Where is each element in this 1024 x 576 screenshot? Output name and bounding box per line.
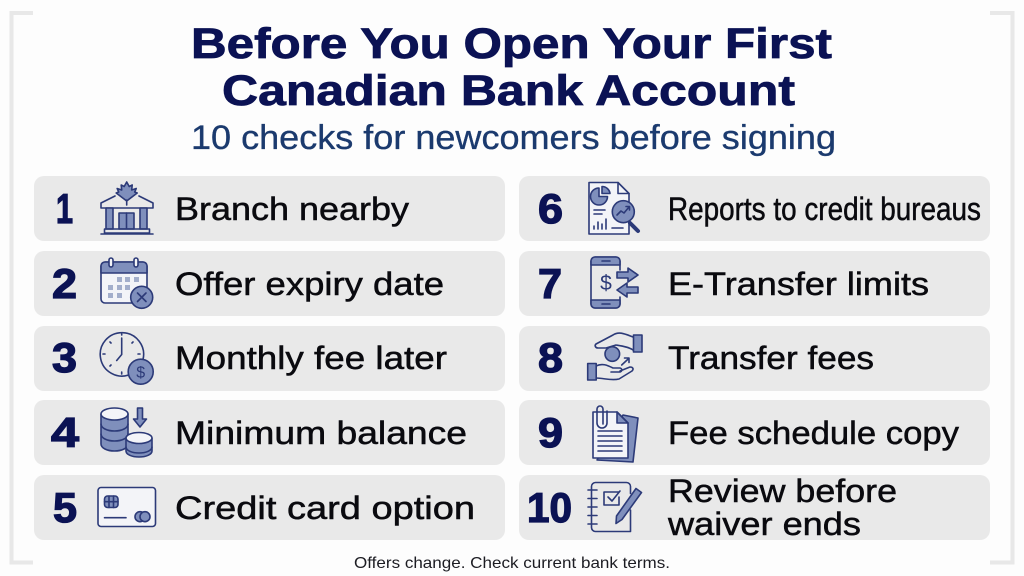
row 9: fee schedule copy: 9 [538,409,563,456]
row 5: credit card option: 5 [53,484,77,531]
row 5: credit card option: Credit card option [175,490,475,526]
row 3: monthly fee later [34,326,505,391]
row 2: offer expiry date [34,251,505,316]
row 1: branch nearby: Branch nearby [175,191,409,227]
row 8: transfer fees [519,326,990,391]
icon: hands exchanging coin [588,333,642,380]
row 1: branch nearby [34,176,505,241]
footer note: Offers change. Check current bank terms. [354,555,670,572]
title [191,20,832,115]
icon: report with magnifier [589,182,638,234]
title: Before You Open Your First [191,20,832,68]
row 3: monthly fee later: Monthly fee later [175,340,447,376]
icon: clock with dollar coin: $ [136,364,145,382]
row 10: review before waiver ends: waiver ends [667,506,861,542]
icon: bank with maple leaf [101,182,153,234]
row 7: e-transfer limits: E-Transfer limits [668,266,929,302]
row 10: review before waiver ends [519,473,990,542]
icon: clipped documents [593,406,638,462]
icon: credit card [98,488,156,526]
icon: phone with transfer arrows: $ [600,272,612,295]
row 10: review before waiver ends: 10 [527,484,572,531]
row 6: reports to credit bureaus: 6 [538,185,563,232]
row 9: fee schedule copy: Fee schedule copy [668,415,959,451]
row 3: monthly fee later: 3 [52,334,77,381]
row 4: minimum balance: Minimum balance [175,415,467,451]
row 5: credit card option [34,475,505,540]
icon: phone with transfer arrows [591,257,638,308]
row 2: offer expiry date: 2 [52,260,77,307]
row 8: transfer fees: 8 [538,334,563,381]
row 7: e-transfer limits: 7 [538,260,562,307]
subtitle: 10 checks for newcomers before signing [191,119,836,157]
row 10: review before waiver ends: Review before [668,473,897,509]
row 1: branch nearby: 1 [56,185,73,232]
icon: notebook with check and pencil [588,482,642,532]
icon: calendar with x [101,258,153,308]
icon: clock with dollar coin [100,333,153,384]
row 6: reports to credit bureaus: Reports to credit bureaus [668,191,981,227]
row 2: offer expiry date: Offer expiry date [175,266,444,302]
title: Canadian Bank Account [222,67,795,115]
row 6: reports to credit bureaus [519,176,990,241]
row 9: fee schedule copy [519,400,990,465]
row 4: minimum balance [34,400,505,465]
icon: coin stacks with arrow [101,408,152,457]
row 4: minimum balance: 4 [51,409,80,456]
row 8: transfer fees: Transfer fees [668,340,874,376]
row 7: e-transfer limits [519,251,990,316]
